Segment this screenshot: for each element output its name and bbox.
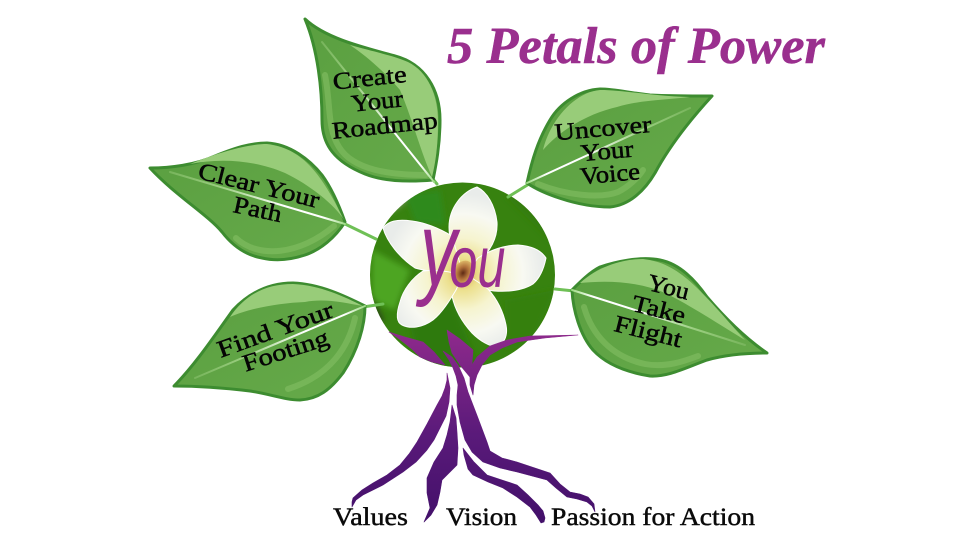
label: Take — [629, 291, 688, 329]
petal: top — [449, 187, 497, 274]
label — [326, 59, 439, 145]
label: Clear Your — [195, 159, 322, 214]
label — [611, 265, 697, 353]
label: Path — [231, 192, 284, 228]
label — [195, 159, 322, 228]
label: Your — [579, 137, 635, 167]
title: 5 Petals of Power — [447, 18, 826, 75]
label — [214, 297, 337, 377]
label: Flight — [611, 311, 685, 353]
petal: bottom right — [452, 274, 507, 347]
you label: y — [420, 191, 457, 308]
leaf: Clear Your Path — [150, 143, 345, 260]
tree roots and trunk — [352, 330, 595, 523]
petal: right — [464, 245, 546, 291]
label: You — [645, 270, 692, 306]
label: Voice — [579, 159, 641, 190]
label: Create — [332, 62, 408, 96]
flower photo: You — [370, 182, 555, 368]
label: Your — [350, 86, 404, 118]
label: Find Your — [214, 297, 337, 364]
leaf: Create Your Roadmap — [305, 19, 440, 182]
petal: left — [383, 220, 463, 274]
label: Roadmap — [331, 108, 439, 145]
foundation label: Passion for Action: Passion for Action — [551, 504, 756, 531]
petal: bottom left — [397, 270, 463, 327]
leaf: You Take Flight — [572, 259, 767, 376]
foundation label: Vision: Vision — [446, 504, 518, 531]
flower centre — [448, 257, 478, 289]
foundation label: Values: Values — [333, 504, 408, 531]
label: Footing — [239, 325, 332, 377]
leaf: Uncover Your Voice — [527, 89, 712, 207]
label: Uncover — [554, 112, 652, 146]
you label: ou — [449, 223, 505, 303]
leaf: Find Your Footing — [174, 283, 365, 400]
stems — [343, 178, 574, 307]
label — [554, 112, 656, 192]
